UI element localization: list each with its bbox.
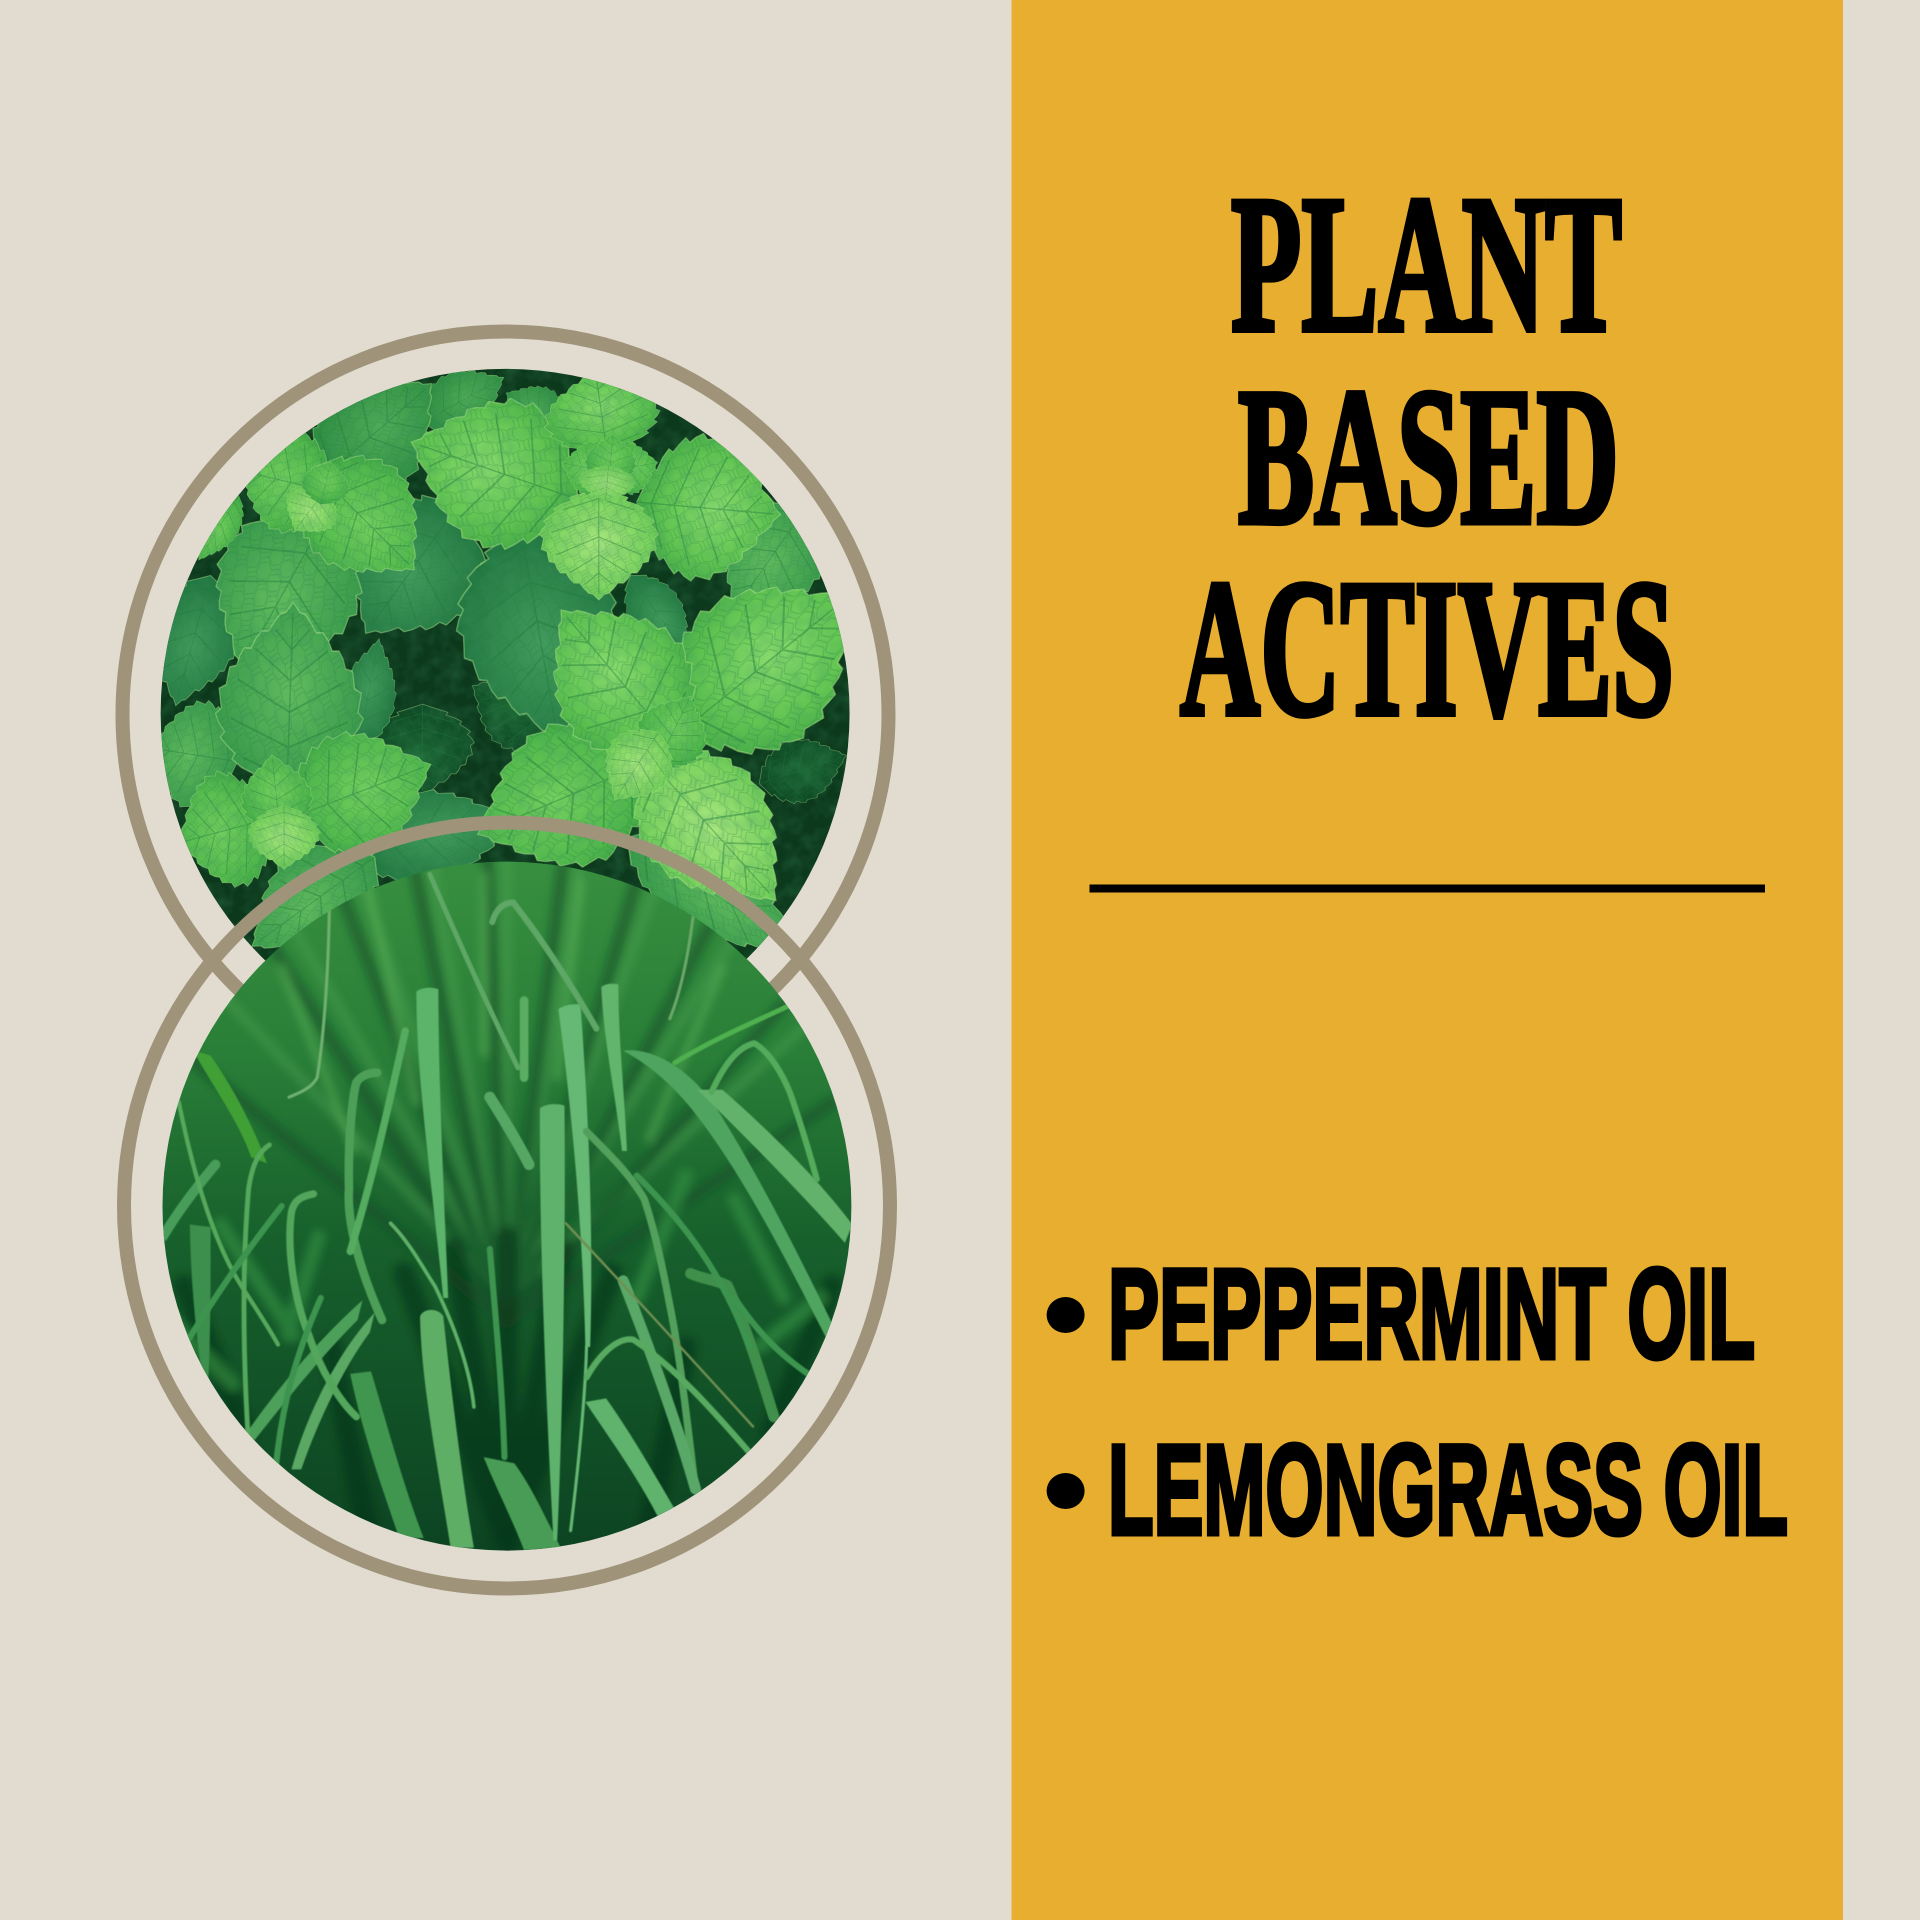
outer ring: peppermint	[122, 332, 888, 1098]
divider line	[1090, 884, 1765, 892]
outer ring: lemongrass	[124, 822, 890, 1588]
title: PLANT	[1231, 156, 1622, 373]
photo: peppermint leaves	[160, 368, 850, 960]
panel: mustard column	[1012, 0, 1843, 1920]
photo: lemongrass blades	[153, 851, 863, 1561]
title	[1180, 156, 1674, 757]
title: BASED	[1238, 348, 1619, 566]
